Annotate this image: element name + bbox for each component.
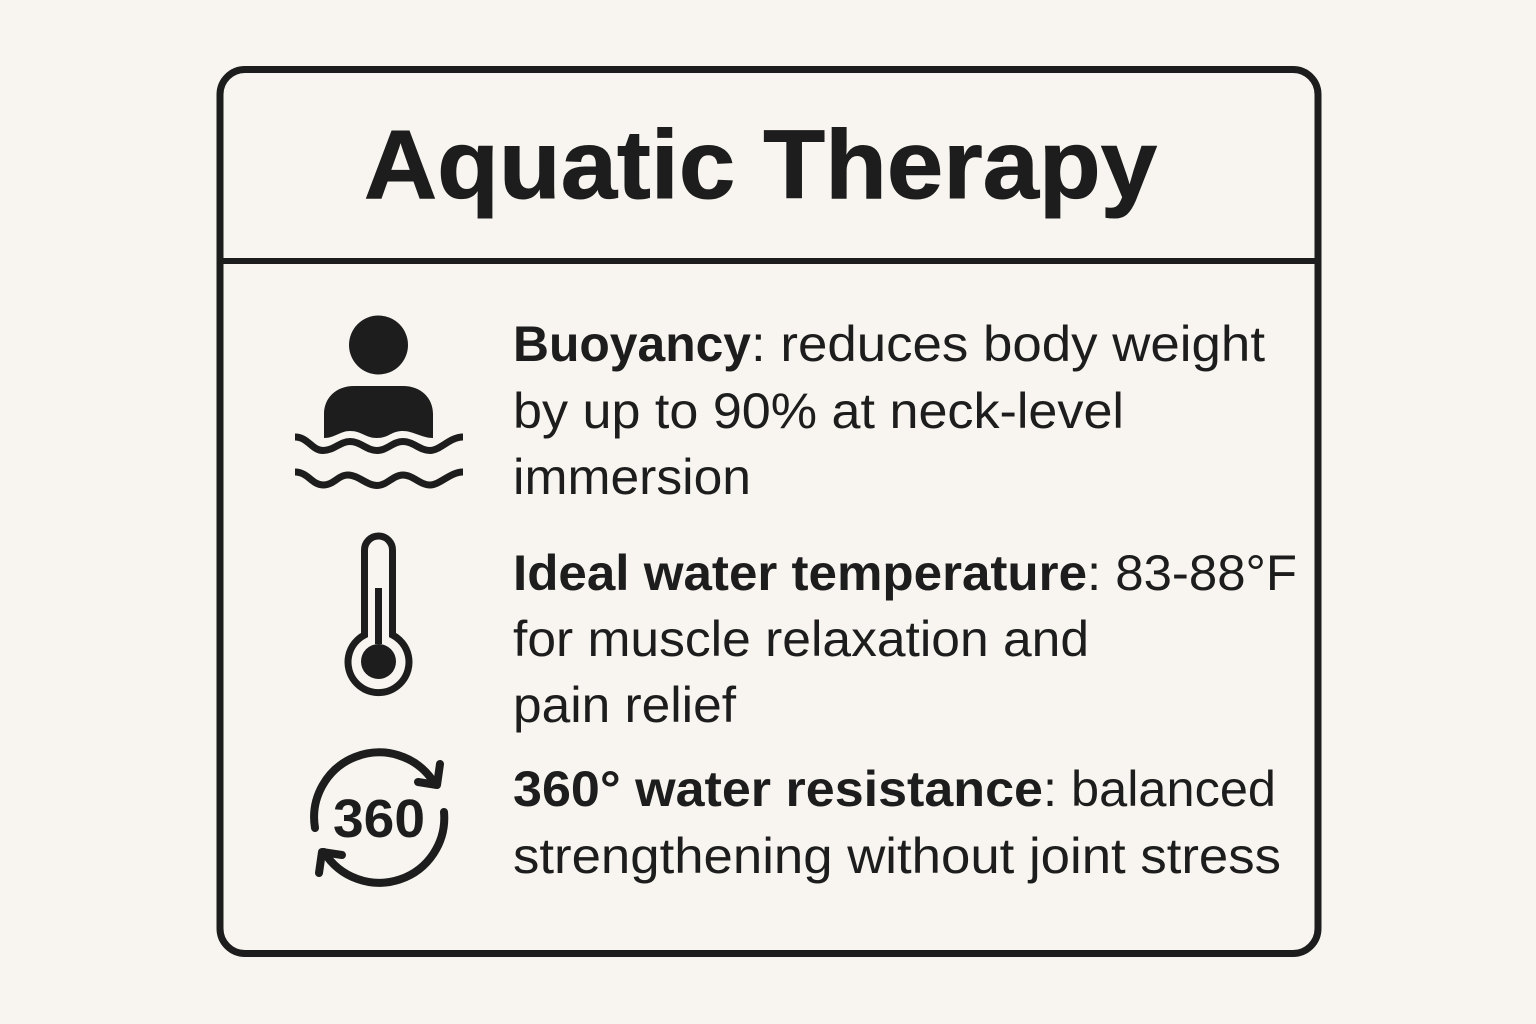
text: buoyancy	[513, 316, 1265, 505]
text: water resistance: : balanced	[1043, 761, 1276, 817]
text: water temperature: Ideal water temperature	[513, 545, 1087, 601]
text: buoyancy: Buoyancy	[513, 316, 751, 372]
icon: 360 rotation	[314, 752, 444, 883]
text: water temperature: pain relief	[513, 677, 736, 733]
icon: 360 rotation: 360	[333, 789, 425, 849]
text: water resistance	[513, 761, 1281, 884]
text: buoyancy: immersion	[513, 449, 751, 505]
title: Aquatic Therapy	[364, 110, 1157, 219]
text: water temperature: : 83-88°F	[1087, 545, 1297, 601]
icon: person in water	[295, 316, 463, 486]
panel: card frame	[220, 70, 1318, 954]
text: buoyancy: by up to 90% at neck-level	[513, 383, 1124, 439]
text: water resistance: strengthening without joint stress	[513, 828, 1281, 884]
text: water temperature: for muscle relaxation and	[513, 611, 1089, 667]
icon: thermometer	[348, 536, 409, 693]
text: buoyancy: : reduces body weight	[751, 316, 1265, 372]
text: water temperature	[513, 545, 1297, 733]
text: water resistance: 360° water resistance	[513, 761, 1043, 817]
